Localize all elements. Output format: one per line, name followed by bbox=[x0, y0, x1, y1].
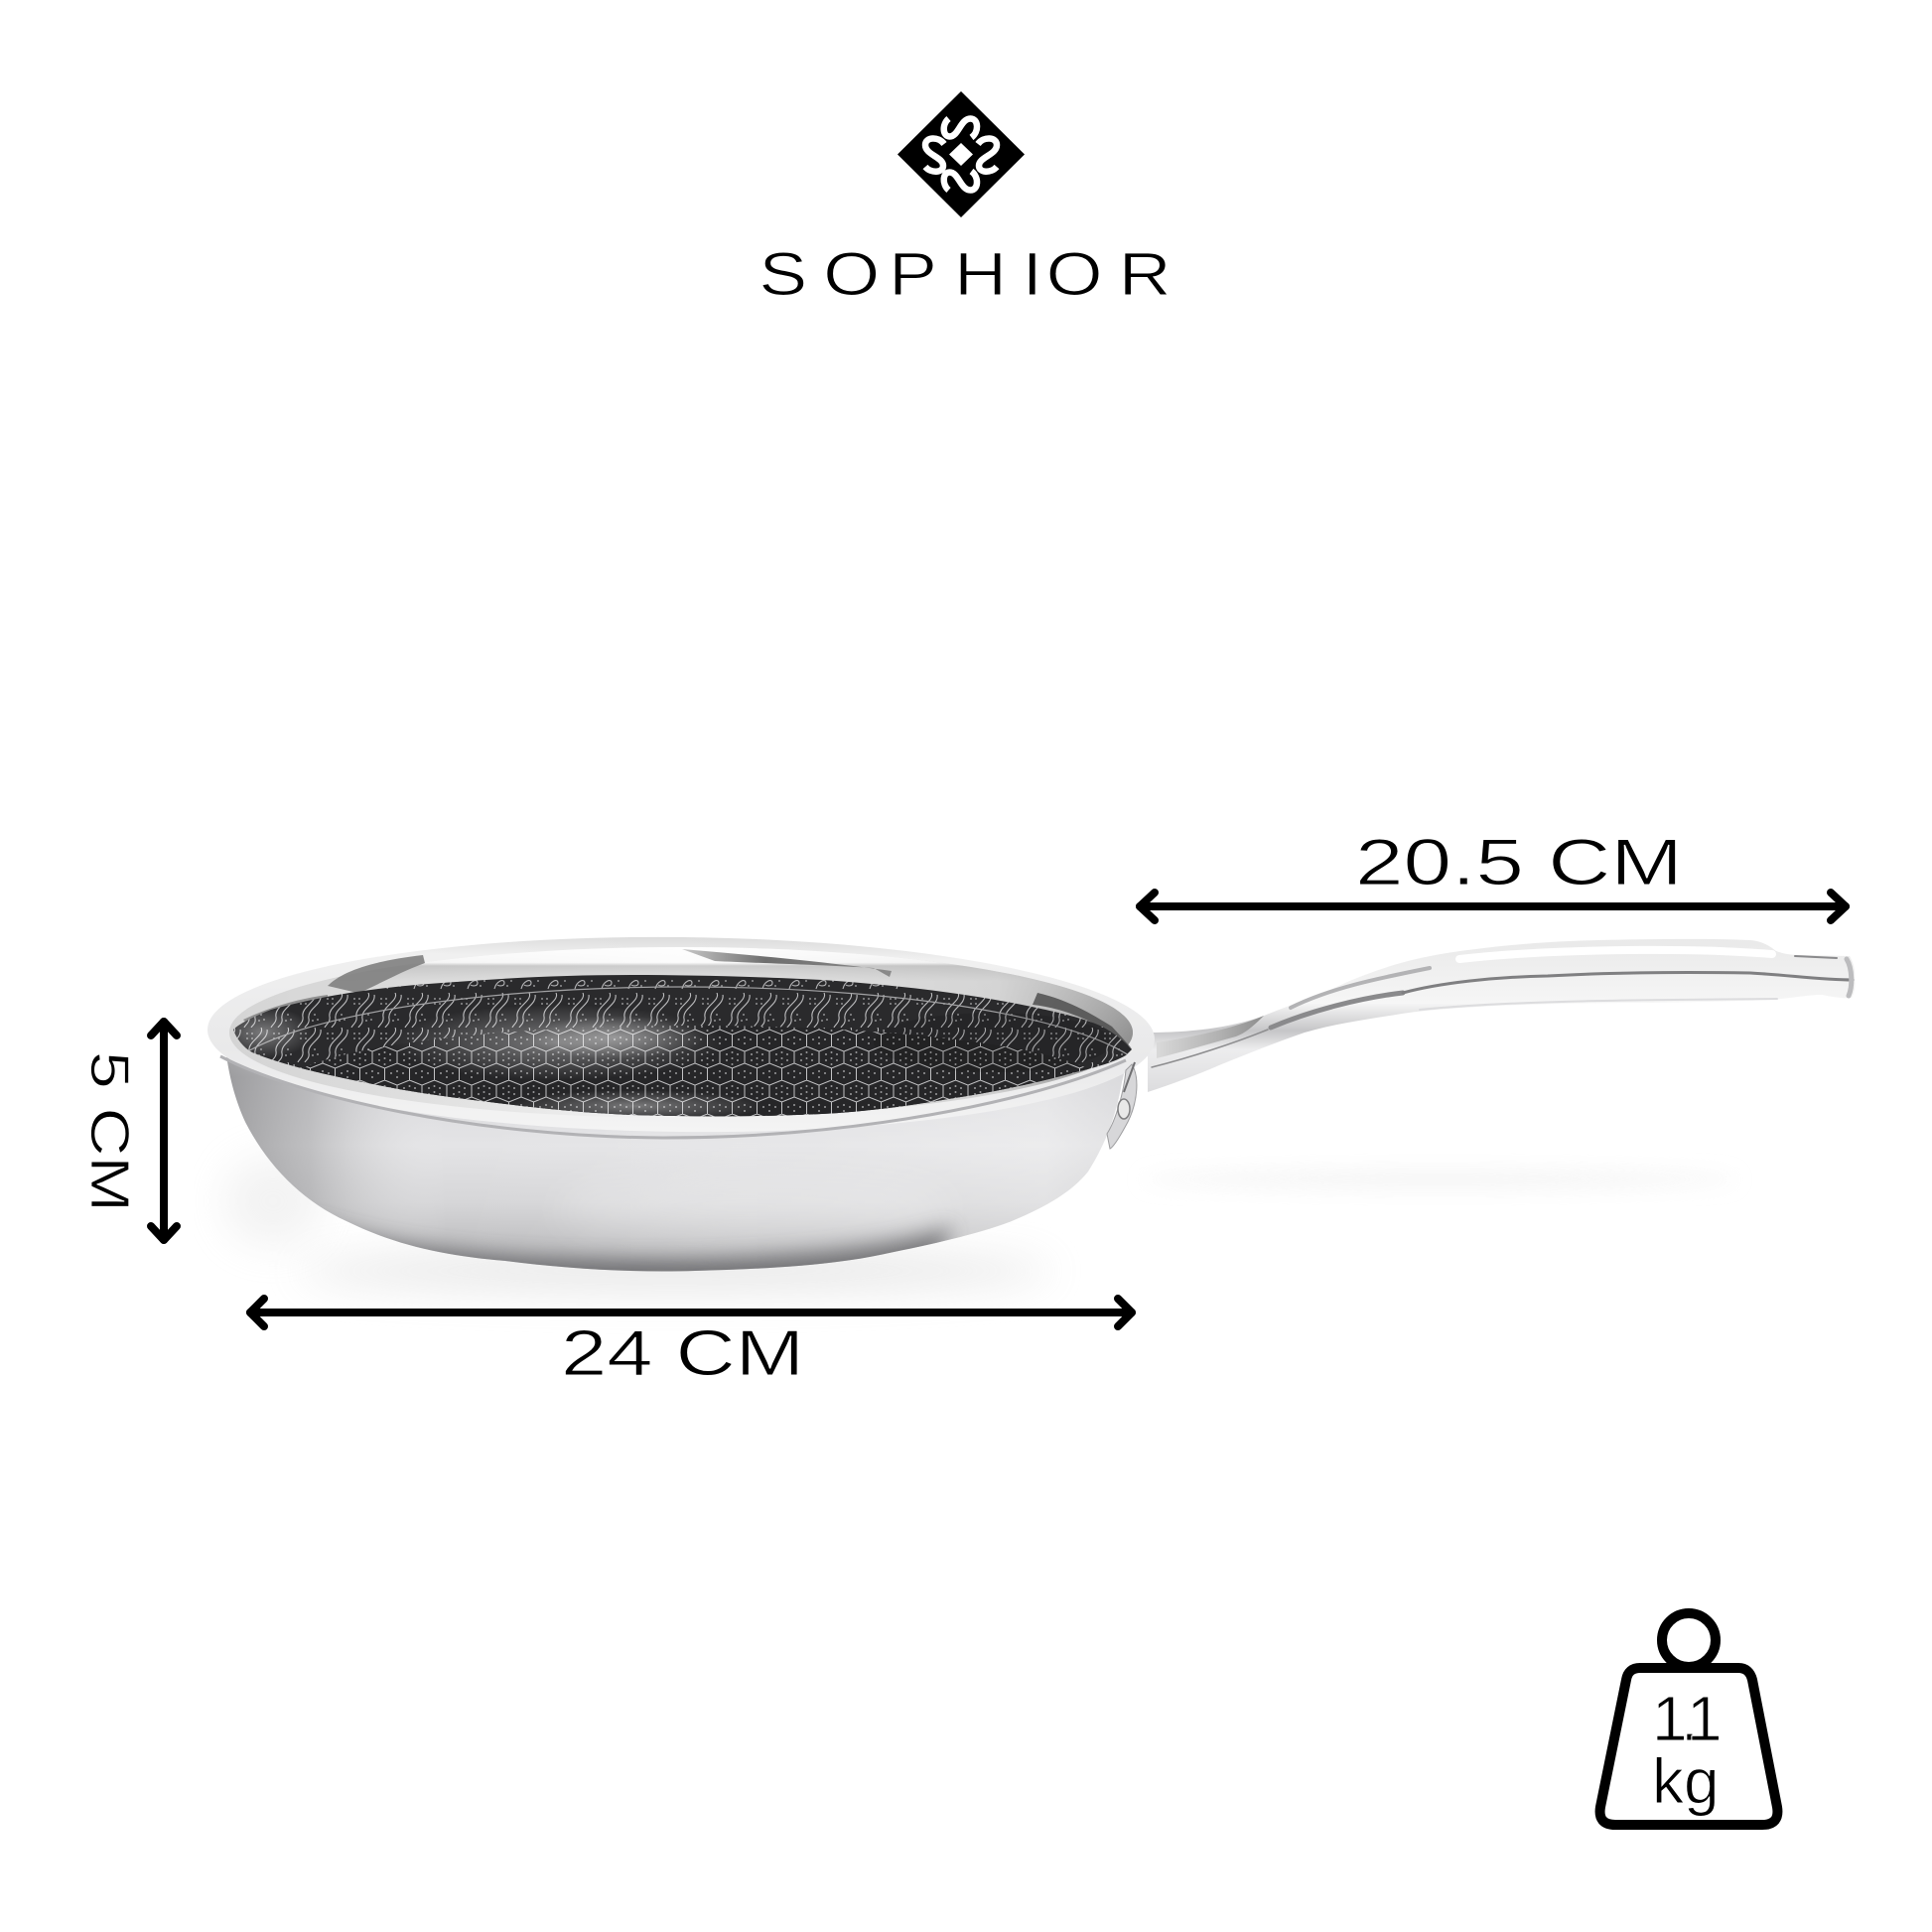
inner wall vertical tone bbox=[229, 947, 1133, 1118]
flame pattern band bbox=[223, 993, 1142, 1122]
label: 5 CM: 5 CM bbox=[79, 1051, 141, 1212]
hexagon pattern bbox=[302, 1026, 1088, 1116]
handle streaks bbox=[1152, 950, 1853, 1067]
non-stick cooking surface bbox=[233, 975, 1132, 1116]
wall reflections bbox=[243, 949, 1132, 1048]
polished inner wall bbox=[229, 947, 1133, 1118]
rim bbox=[207, 932, 1156, 1137]
weight unit: kg bbox=[1652, 1745, 1720, 1817]
logo wordmark: SOPHIOR bbox=[759, 241, 1172, 309]
brand logo bbox=[759, 91, 1172, 309]
dimension: handle length 20.5 CM bbox=[1140, 825, 1846, 920]
label: 20.5 CM: 20.5 CM bbox=[1355, 825, 1683, 898]
dimension: pan height 5 CM bbox=[79, 1022, 177, 1240]
arrow: handle length bbox=[1140, 893, 1846, 920]
weight value: 1.1 bbox=[1652, 1683, 1723, 1754]
pan photo bbox=[207, 932, 1855, 1293]
dimension: pan diameter 24 CM bbox=[250, 1299, 1132, 1389]
surface highlights bbox=[405, 1009, 707, 1076]
logo mark: diamond bbox=[897, 91, 1025, 217]
floor shadow bbox=[223, 1157, 1737, 1293]
label: 24 CM: 24 CM bbox=[561, 1316, 804, 1389]
pan body bbox=[226, 1042, 1132, 1272]
arrow: pan height bbox=[151, 1022, 177, 1240]
arrow: pan diameter bbox=[250, 1299, 1132, 1326]
band dividers bbox=[248, 986, 1128, 1054]
handle bbox=[1148, 939, 1855, 1092]
weight icon bbox=[1600, 1613, 1777, 1825]
front lip shadow line bbox=[220, 1056, 1126, 1138]
rivet plate bbox=[1107, 1062, 1137, 1149]
top motif band bbox=[349, 975, 950, 993]
handle wedge bbox=[1157, 1016, 1264, 1058]
icon: weight outline bbox=[1600, 1613, 1777, 1825]
body shading bbox=[226, 1057, 1067, 1271]
